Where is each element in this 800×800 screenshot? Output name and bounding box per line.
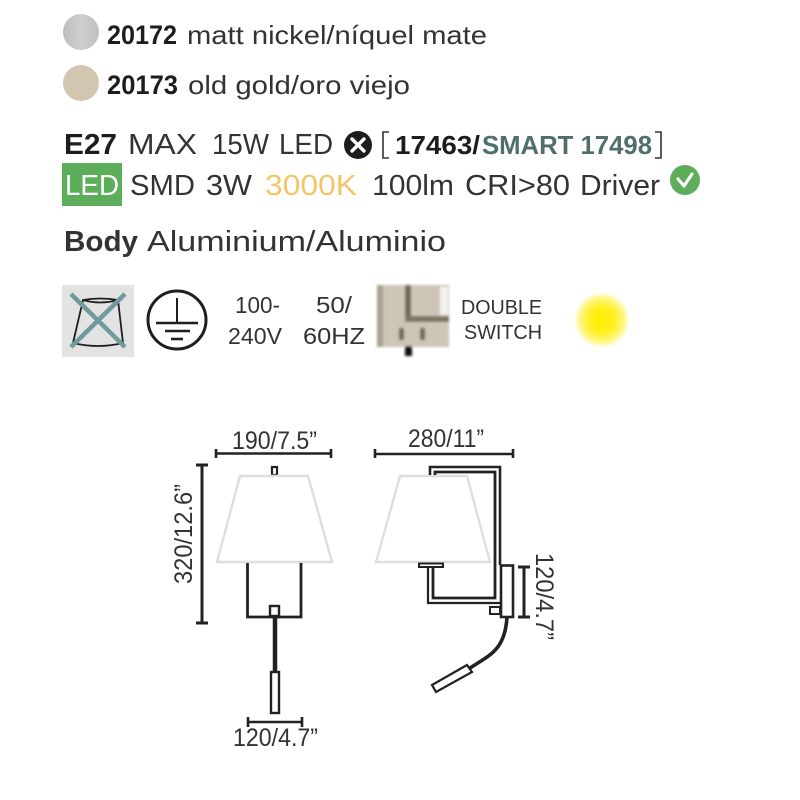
frequency bbox=[303, 292, 365, 349]
LED specification line bbox=[62, 163, 700, 206]
double switch label bbox=[461, 297, 542, 344]
Aluminium: Aluminium/Aluminio bbox=[147, 226, 446, 258]
arm bbox=[419, 467, 500, 603]
code 17463: 17463/ bbox=[395, 130, 480, 160]
voltage: 240V bbox=[228, 323, 283, 349]
finish option: old gold bbox=[63, 65, 410, 101]
MAX: MAX bbox=[128, 129, 197, 161]
icon: not included bbox=[344, 131, 372, 159]
width dimension 280 bbox=[375, 425, 513, 458]
LED: LED bbox=[279, 129, 333, 161]
label: old gold: old gold/oro viejo bbox=[188, 70, 410, 100]
height dimension 120: 120/4.7” bbox=[530, 553, 558, 640]
wall plate bbox=[501, 566, 513, 617]
3W: 3W bbox=[206, 170, 253, 202]
switch bbox=[270, 606, 279, 616]
height dimension 320 bbox=[170, 465, 208, 623]
frequency: 60HZ bbox=[303, 323, 365, 349]
reading arm bbox=[273, 617, 277, 672]
photo: double switch bbox=[377, 285, 449, 356]
ceiling stud bbox=[272, 467, 277, 475]
code 20172: 20172 bbox=[107, 20, 177, 50]
width dimension 280: 280/11” bbox=[408, 425, 484, 453]
bulb specification line bbox=[64, 129, 661, 161]
height dimension 320: 320/12.6” bbox=[170, 484, 198, 584]
width dimension 120: 120/4.7” bbox=[233, 724, 318, 752]
code 20173: 20173 bbox=[107, 70, 178, 100]
E27: E27 bbox=[64, 129, 117, 161]
label: matt nickel: matt nickel/níquel mate bbox=[187, 20, 487, 50]
double switch label: SWITCH bbox=[464, 322, 542, 344]
width dimension 190: 190/7.5” bbox=[232, 427, 317, 455]
icon: earth ground bbox=[148, 291, 206, 349]
frequency: 50/ bbox=[316, 292, 353, 318]
3000K: 3000K bbox=[265, 170, 358, 202]
close bracket bbox=[655, 132, 661, 158]
voltage bbox=[228, 292, 283, 349]
side view drawing bbox=[375, 425, 558, 692]
100lm: 100lm bbox=[372, 170, 454, 202]
SMART 17498: SMART 17498 bbox=[482, 130, 652, 160]
icon: included check bbox=[670, 165, 700, 195]
reading head bbox=[432, 665, 472, 692]
front view drawing bbox=[170, 427, 332, 752]
swatch: old gold bbox=[63, 65, 99, 101]
flexible arm bbox=[470, 617, 507, 668]
Body: Body bbox=[64, 226, 138, 258]
swatch: matt nickel bbox=[63, 14, 99, 50]
voltage: 100- bbox=[235, 292, 280, 318]
lamp body frame bbox=[248, 563, 301, 617]
double switch label: DOUBLE bbox=[461, 297, 542, 319]
15W: 15W bbox=[212, 129, 270, 161]
icon: shade not included bbox=[62, 285, 134, 357]
reading head bbox=[271, 672, 279, 713]
LED badge: LED bbox=[65, 170, 119, 202]
finish option: matt nickel bbox=[63, 14, 487, 50]
LED badge bbox=[62, 163, 122, 206]
height dimension 120 bbox=[518, 553, 558, 640]
SMD: SMD bbox=[130, 170, 195, 202]
Driver: Driver bbox=[580, 170, 660, 202]
CRI>80: CRI>80 bbox=[465, 170, 570, 202]
switch bbox=[490, 607, 500, 614]
lamp shade bbox=[376, 476, 490, 562]
open bracket bbox=[383, 132, 389, 158]
icon: warm light glow bbox=[574, 292, 630, 348]
body material line bbox=[64, 226, 446, 258]
lamp shade bbox=[217, 476, 332, 562]
